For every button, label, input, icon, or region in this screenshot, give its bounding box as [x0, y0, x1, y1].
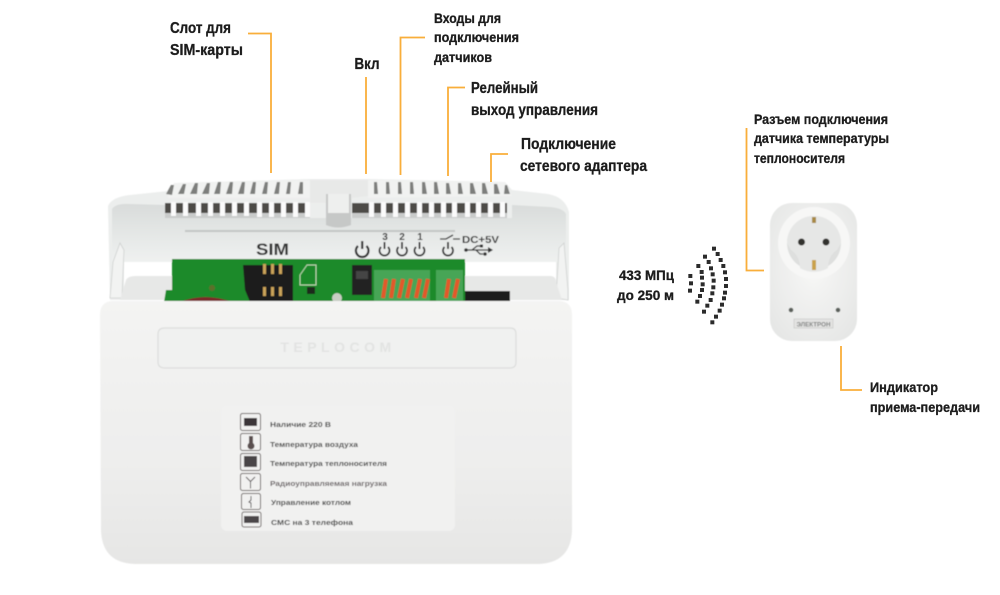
vent slots [166, 182, 510, 195]
panel: indicator labels: Радиоуправляемая нагрузка [270, 479, 388, 488]
icon: radio waves [688, 247, 728, 324]
leader line: power [365, 77, 367, 174]
icon: boiler control [242, 494, 260, 510]
leader line: sensor socket [746, 128, 764, 270]
lid markings: 1 [417, 232, 423, 243]
leader line: sensor inputs [400, 38, 425, 175]
label: adapter: сетевого адаптера [520, 158, 647, 175]
lid markings: 3 [382, 232, 388, 243]
label: sensor inputs: подключения [434, 29, 519, 45]
device: thermostat with open lid [100, 179, 572, 564]
leader line: SIM slot [248, 34, 271, 173]
label: wireless range: до 250 м [617, 288, 674, 303]
lid markings: 2 [399, 232, 405, 243]
icon: antenna [240, 474, 260, 490]
panel: indicator labels: Управление котлом [271, 498, 351, 507]
label: indicator: Индикатор [870, 379, 938, 395]
label: wireless range: 433 МПц [619, 268, 675, 283]
label: indicator: приема-передачи [870, 399, 980, 415]
lid markings: DC+5V [462, 235, 499, 246]
socket module [770, 203, 857, 341]
label: relay: выход управления [471, 102, 598, 119]
label: sensor socket: датчика температуры [754, 130, 889, 146]
label: sensor inputs: Входы для [434, 10, 501, 26]
label: sensor socket: Разъем подключения [754, 111, 888, 127]
label: sensor socket: теплоносителя [754, 150, 845, 166]
leader line: relay [448, 88, 465, 176]
lid markings [256, 232, 499, 259]
brand name: TEPLOCOM [280, 339, 396, 355]
icon: mains [240, 414, 260, 430]
lid markings: SIM [256, 240, 289, 259]
panel: indicator labels: Температура теплоносителя [270, 459, 387, 468]
label: sensor inputs: датчиков [434, 49, 492, 65]
label: adapter: Подключение [521, 136, 616, 153]
label: relay: Релейный [471, 80, 538, 97]
panel: indicator labels: СМС на 3 телефона [271, 518, 354, 527]
panel: indicator labels: Наличие 220 В [270, 420, 332, 429]
icon: air temperature [240, 434, 260, 450]
lid clip [310, 180, 368, 203]
icon: coolant temperature [240, 454, 260, 470]
lid hinges [110, 243, 124, 298]
icon: GSM [242, 512, 261, 527]
label: SIM slot: Слот для [170, 20, 231, 37]
leader line: adapter [491, 154, 508, 182]
open lid [108, 179, 569, 300]
socket module: ЭЛЕКТРОН [796, 322, 831, 328]
panel: indicator labels: Температура воздуха [270, 440, 359, 449]
leader line: indicator [841, 346, 862, 390]
device back part [120, 276, 562, 300]
panel: indicator labels [221, 405, 455, 531]
device body [100, 301, 572, 564]
label: SIM slot: SIM-карты [170, 42, 243, 59]
circuit board [164, 259, 510, 310]
label: power: Вкл [354, 56, 380, 73]
